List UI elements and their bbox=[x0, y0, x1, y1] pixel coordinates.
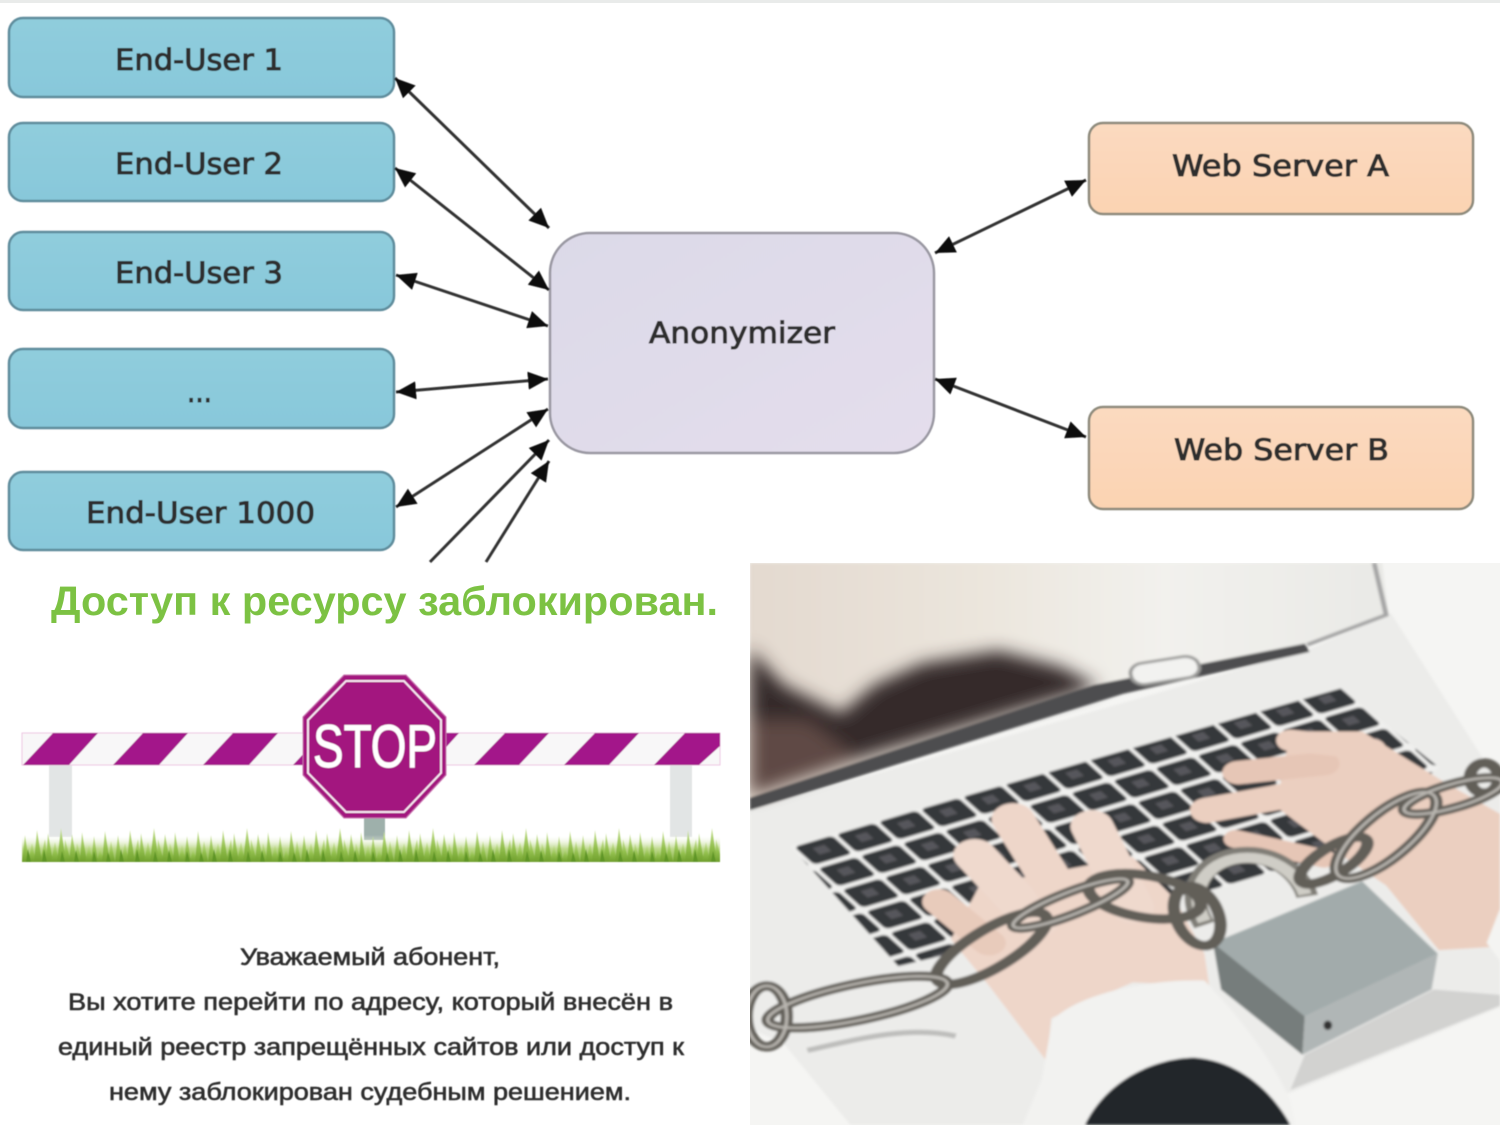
box: Web Server A bbox=[1089, 123, 1473, 214]
box: Web Server B: Web Server B bbox=[1174, 433, 1389, 467]
box: End-User 1 bbox=[9, 18, 394, 97]
left hand bbox=[939, 819, 1209, 1061]
box: End-User 2 bbox=[9, 123, 394, 201]
arrow: End-User 1000 to Anonymizer bbox=[396, 409, 548, 507]
illustration: stop barrier bbox=[22, 675, 720, 862]
top edge strip bbox=[0, 0, 1500, 3]
arrow: incoming from below 1 bbox=[430, 440, 549, 562]
box: End-User 3 bbox=[9, 232, 394, 310]
arrow: End-User 3 to Anonymizer bbox=[396, 275, 548, 326]
line 1: Уважаемый абонент, bbox=[240, 944, 500, 971]
line 2: Вы хотите перейти по адресу, который внесён в bbox=[68, 989, 673, 1016]
padlock shackle bbox=[1196, 855, 1307, 925]
box: ellipsis bbox=[9, 349, 394, 428]
keyboard front shadow bbox=[1290, 989, 1500, 1090]
chain bbox=[747, 763, 1500, 1047]
grass bbox=[22, 827, 720, 862]
keyboard bbox=[791, 688, 1439, 966]
right post bbox=[670, 765, 692, 837]
box: End-User 1000 bbox=[9, 472, 394, 550]
chain highlights bbox=[747, 771, 1500, 1047]
box: ellipsis: ... bbox=[187, 375, 212, 409]
arrow: ellipsis to Anonymizer bbox=[396, 379, 548, 392]
stop sign bbox=[303, 675, 446, 818]
left post bbox=[49, 765, 72, 837]
right hand bbox=[1207, 731, 1500, 950]
arrow: incoming from below 2 bbox=[486, 461, 549, 562]
box: Web Server A: Web Server A bbox=[1172, 149, 1389, 183]
panel: access blocked notice bbox=[22, 578, 720, 1106]
chain shadow on laptop bbox=[807, 1032, 956, 1050]
arrow: Anonymizer to Web Server B bbox=[935, 379, 1086, 437]
panel: anonymizer network diagram bbox=[9, 18, 1473, 562]
hinge bbox=[1128, 655, 1202, 686]
box: Anonymizer bbox=[550, 233, 934, 453]
laptop body bbox=[750, 613, 1500, 1125]
sign post bbox=[364, 816, 385, 840]
arrow: Anonymizer to Web Server A bbox=[935, 180, 1086, 253]
box: End-User 1000: End-User 1000 bbox=[86, 496, 315, 530]
box: Web Server B bbox=[1089, 407, 1473, 509]
barrier bar bbox=[22, 733, 720, 765]
jacket bbox=[1085, 1058, 1290, 1125]
arrow: End-User 1 to Anonymizer bbox=[395, 78, 549, 228]
heading: Доступ к ресурсу заблокирован. bbox=[51, 578, 718, 624]
arrow: End-User 2 to Anonymizer bbox=[395, 168, 549, 290]
stop sign: STOP bbox=[313, 713, 437, 780]
screen bezel bbox=[750, 644, 1310, 810]
photo: chained hands on laptop bbox=[747, 563, 1500, 1125]
laptop screen bbox=[750, 563, 1389, 801]
left sleeve bbox=[1023, 980, 1295, 1125]
screen right edge bbox=[1307, 563, 1386, 645]
screen reflection: hands bbox=[750, 649, 1099, 796]
box: End-User 2: End-User 2 bbox=[115, 147, 283, 181]
message text bbox=[58, 944, 685, 1106]
padlock body bbox=[1213, 881, 1438, 1055]
box: Anonymizer: Anonymizer bbox=[649, 316, 835, 350]
line 3: единый реестр запрещённых сайтов или доступ к bbox=[58, 1034, 685, 1061]
right sleeve bbox=[1486, 910, 1500, 950]
line 4: нему заблокирован судебным решением. bbox=[109, 1079, 631, 1106]
box: End-User 1: End-User 1 bbox=[115, 43, 283, 77]
box: End-User 3: End-User 3 bbox=[115, 256, 283, 290]
